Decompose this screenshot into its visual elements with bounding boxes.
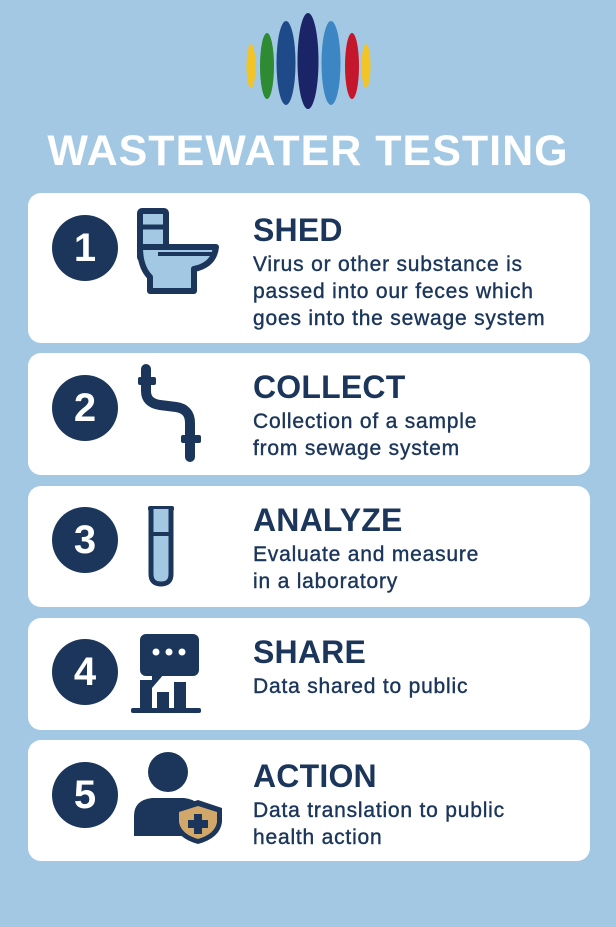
- panel: collect: [28, 353, 590, 475]
- number 5: [52, 762, 118, 828]
- text: shed: SHED: [253, 212, 343, 248]
- text: analyze: ANALYZE: [253, 502, 403, 538]
- text: share: SHARE: [253, 634, 366, 670]
- text: shed: passed into our feces which: [253, 280, 534, 303]
- logo: [246, 13, 370, 109]
- panel: action: [28, 740, 590, 861]
- text: collect: [253, 369, 477, 460]
- number 2: [52, 375, 118, 441]
- text: collect: from sewage system: [253, 437, 460, 460]
- panel: share: [28, 618, 590, 730]
- text: shed: goes into the sewage system: [253, 307, 545, 330]
- text: collect: COLLECT: [253, 369, 406, 405]
- text: analyze: in a laboratory: [253, 570, 398, 593]
- panel: analyze: [28, 486, 590, 607]
- number 3: 3: [74, 518, 96, 562]
- number 4: 4: [74, 650, 96, 694]
- number 1: 1: [74, 226, 96, 270]
- icon: chat and chart: [131, 634, 201, 713]
- text: share: [253, 634, 468, 698]
- text: action: health action: [253, 826, 382, 849]
- icon: person with shield: [134, 752, 222, 844]
- text: action: [253, 758, 505, 849]
- text: share: Data shared to public: [253, 675, 468, 698]
- icon: pipe: [138, 364, 201, 462]
- text: collect: Collection of a sample: [253, 410, 477, 433]
- text: shed: [252, 212, 545, 330]
- text: analyze: [253, 502, 479, 593]
- number 5: 5: [74, 773, 96, 817]
- text: action: Data translation to public: [253, 799, 505, 822]
- text: analyze: Evaluate and measure: [253, 543, 479, 566]
- icon: test tube: [148, 506, 174, 586]
- number 3: [52, 507, 118, 573]
- text: shed: Virus or other substance is: [253, 253, 523, 276]
- panel: shed: [28, 193, 590, 343]
- icon: toilet: [137, 208, 219, 294]
- title: WASTEWATER TESTING: [47, 127, 569, 175]
- text: action: ACTION: [253, 758, 377, 794]
- number 2: 2: [74, 386, 96, 430]
- number 4: [52, 639, 118, 705]
- number 1: [52, 215, 118, 281]
